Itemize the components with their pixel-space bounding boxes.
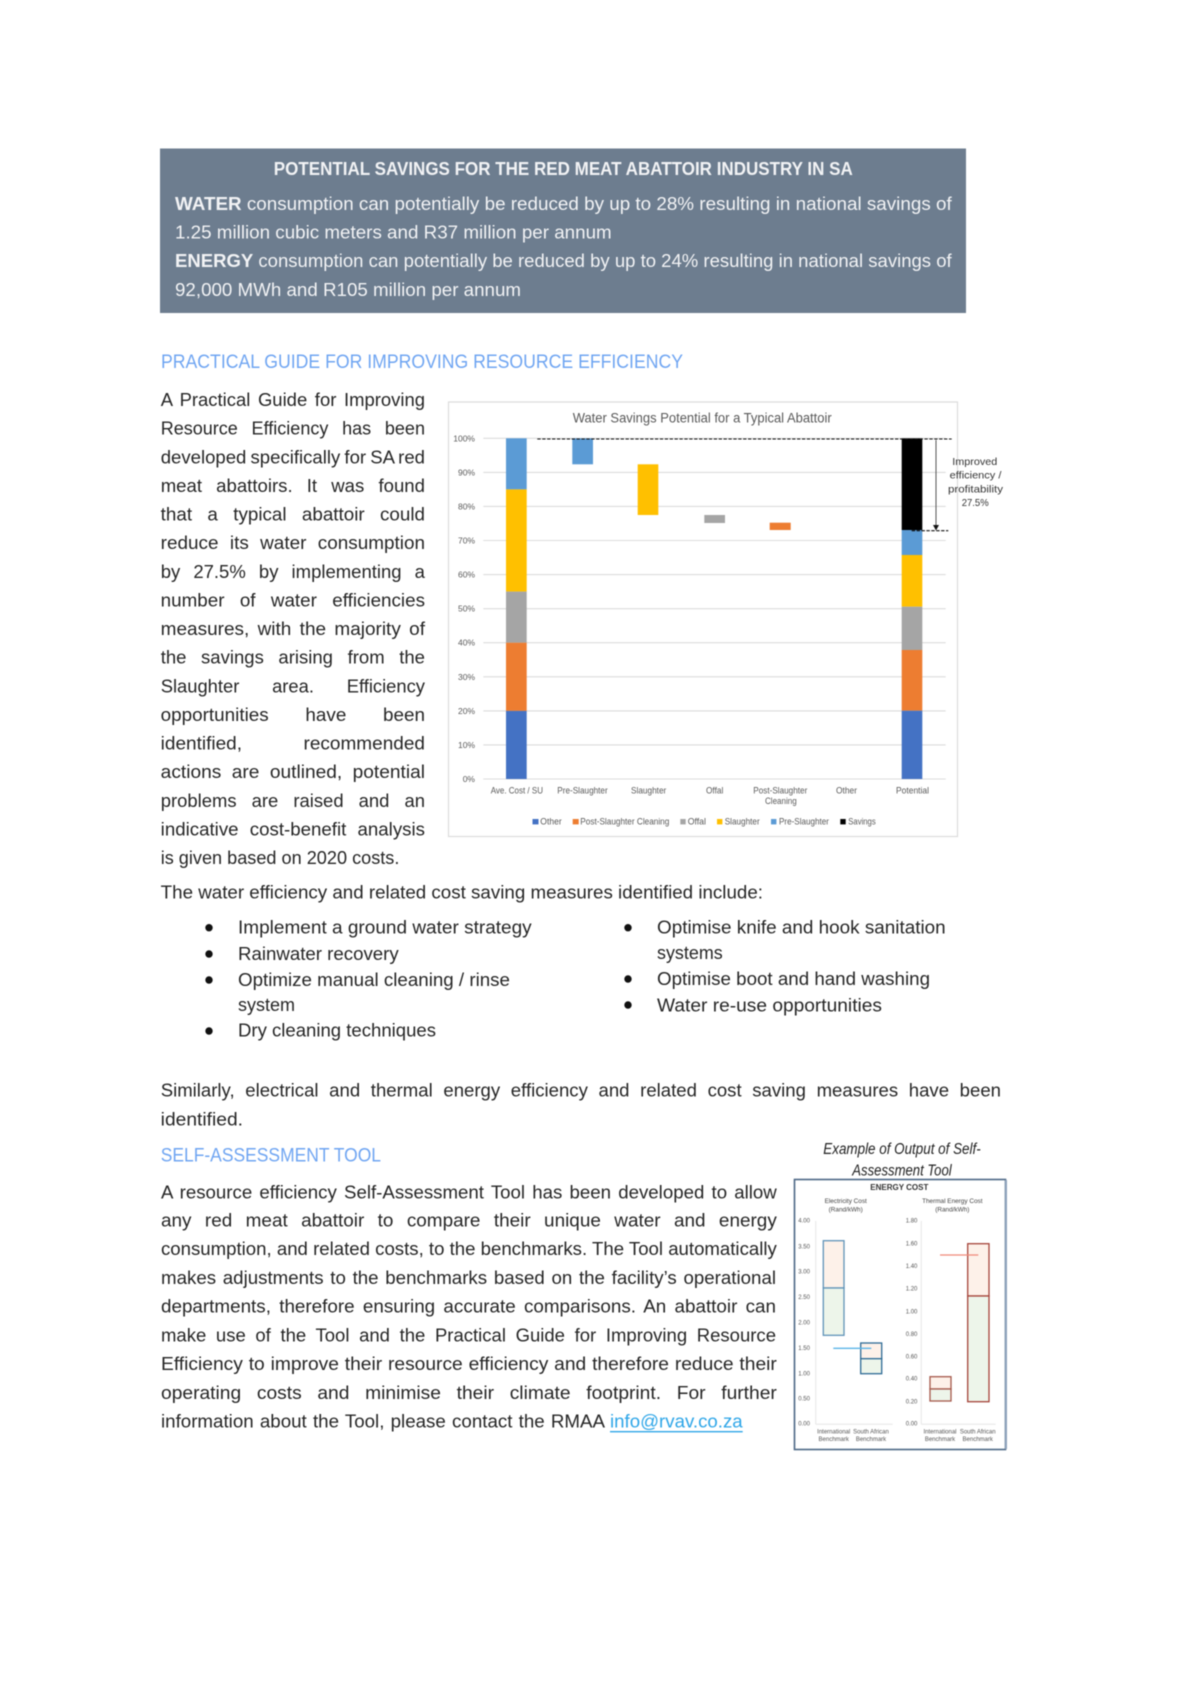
sub-chart: thermal energy cost: 1.60	[906, 1241, 918, 1247]
chart legend: Savings	[848, 816, 876, 826]
sub-chart: electricity cost: 0.00	[798, 1422, 811, 1428]
y axis labels: 100%	[453, 433, 475, 443]
sub-chart: thermal energy cost: 0.60	[906, 1355, 918, 1361]
annotation: improved efficiency: profitability	[948, 485, 1004, 496]
text block: practical guide description: measures, with the majority of	[161, 618, 426, 639]
annotation: improved efficiency	[948, 457, 1004, 509]
bullet list: left column: Implement a ground water strategy	[238, 916, 532, 937]
sub-chart: thermal energy cost	[906, 1198, 996, 1443]
chart: water savings potential	[448, 402, 1004, 836]
sub-chart: thermal energy cost: 1.80	[906, 1219, 918, 1225]
text: energy measures	[161, 1080, 1001, 1129]
y axis labels: 10%	[458, 740, 475, 750]
sub-chart: electricity cost: 4.00	[798, 1219, 811, 1225]
y axis labels: 60%	[458, 570, 475, 580]
heading: self-assessment tool: SELF-ASSESSMENT TOOL	[161, 1145, 381, 1167]
banner text: energy savings: ENERGY consumption can potentially be reduced by up to 24% resulting in national savings of	[175, 250, 953, 271]
sub-chart: thermal energy cost: 0.20	[906, 1400, 918, 1406]
sub-chart: electricity cost: 0.50	[798, 1397, 811, 1403]
text block: self-assessment description: make use of the Tool and the Practical Guide for Improving Resource	[161, 1325, 776, 1346]
y axis labels: 70%	[458, 536, 475, 546]
text block: practical guide description: Resource Efficiency has been	[161, 418, 425, 439]
sub-chart: electricity cost: 1.50	[798, 1346, 811, 1352]
stacked bar: potential with savings	[902, 438, 922, 779]
banner text: energy savings: 92,000 MWh and R105 million per annum	[175, 279, 521, 300]
heading: practical guide: PRACTICAL GUIDE FOR IMPROVING RESOURCE EFFICIENCY	[161, 351, 683, 373]
y axis labels: 80%	[458, 501, 475, 511]
sub-chart: electricity cost: Benchmark	[819, 1437, 850, 1443]
text block: practical guide description: opportunities have been	[161, 704, 425, 725]
sub-chart: electricity cost: 3.50	[798, 1244, 811, 1250]
sub-chart: thermal energy cost: Thermal Energy Cost	[922, 1198, 983, 1205]
chart legend: Post-Slaughter Cleaning	[580, 816, 669, 826]
sub-chart: thermal energy cost: 0.80	[906, 1332, 918, 1338]
text block: practical guide description: indicative cost-benefit analysis	[161, 818, 425, 839]
sub-chart: electricity cost	[798, 1198, 893, 1443]
x axis labels	[491, 785, 929, 806]
sub-chart: thermal energy cost: Benchmark	[963, 1437, 994, 1443]
x axis labels: Pre-Slaughter	[557, 785, 608, 795]
sub-chart: electricity cost: International	[817, 1429, 850, 1435]
sub-chart: electricity cost: (Rand/kWh)	[829, 1207, 863, 1214]
sub-chart: electricity cost: South African	[853, 1429, 889, 1435]
bullet list: left column: Rainwater recovery	[238, 943, 399, 964]
sub-chart: thermal energy cost: 0.00	[906, 1422, 918, 1428]
x axis labels: Ave. Cost / SU	[491, 785, 543, 795]
banner heading: POTENTIAL SAVINGS FOR THE RED MEAT ABATTOIR INDUSTRY IN SA	[274, 158, 853, 179]
chart: energy cost benchmark output	[794, 1180, 1006, 1450]
y axis labels: 30%	[458, 672, 475, 682]
annotation: improved efficiency: Improved	[952, 457, 998, 468]
waterfall bar: post-slaughter cleaning	[770, 523, 791, 530]
x axis labels: Offal	[706, 785, 723, 795]
benchmark box: international electricity	[823, 1241, 844, 1335]
text block: self-assessment description: departments, therefore ensuring accurate comparisons. An abattoir can	[161, 1296, 776, 1317]
text block: practical guide description: the savings arising from the	[161, 647, 425, 668]
benchmark box: international thermal	[930, 1377, 951, 1401]
text: energy measures: identified.	[161, 1108, 243, 1129]
sub-chart: thermal energy cost: 1.40	[906, 1264, 918, 1270]
text: energy measures: Similarly, electrical and thermal energy efficiency and related cost saving measures have been	[161, 1080, 1001, 1101]
sub-chart: thermal energy cost: 1.20	[906, 1287, 918, 1293]
y axis labels: 20%	[458, 706, 475, 716]
text block: self-assessment description: A resource efficiency Self-Assessment Tool has been developed to allow	[161, 1181, 777, 1202]
text block: practical guide description	[161, 389, 426, 868]
text block: practical guide description: actions are outlined, potential	[161, 761, 425, 782]
chart title: Water Savings Potential for a Typical Abattoir	[573, 410, 832, 425]
bullet list: right column: Water re-use opportunities	[657, 995, 882, 1016]
text block: practical guide description: number of water efficiencies	[161, 589, 425, 610]
bullet list: left column: Dry cleaning techniques	[238, 1020, 436, 1041]
x axis labels: Other	[836, 785, 857, 795]
x axis labels: Potential	[896, 785, 929, 795]
text block: self-assessment description: makes adjustments to the benchmarks based on the facility’s operational	[161, 1267, 776, 1288]
x axis labels: Slaughter	[631, 785, 666, 795]
panel: potential savings banner	[160, 148, 966, 313]
sub-chart: thermal energy cost: 0.40	[906, 1377, 918, 1383]
chart caption	[823, 1141, 981, 1179]
y axis labels: 0%	[463, 774, 475, 784]
y axis labels: 90%	[458, 467, 475, 477]
sub-chart: electricity cost: Electricity Cost	[825, 1198, 867, 1205]
y axis labels: 40%	[458, 638, 475, 648]
text block: practical guide description: A Practical Guide for Improving	[161, 389, 425, 410]
annotation: improved efficiency: efficiency /	[950, 470, 1002, 481]
bullet list: left column	[205, 916, 532, 1041]
text block: self-assessment description: any red meat abattoir to compare their unique water and energy	[161, 1210, 778, 1231]
text block: self-assessment description: consumption, and related costs, to the benchmarks. The Tool automatically	[161, 1238, 777, 1259]
chart heading: energy cost: ENERGY COST	[870, 1183, 928, 1192]
x axis labels: Cleaning	[765, 796, 797, 806]
bullet list: right column	[624, 916, 946, 1016]
email link: info@rvav.co.za	[610, 1411, 743, 1432]
sub-chart: electricity cost: 2.50	[798, 1295, 811, 1301]
chart caption: Example of Output of Self-	[823, 1141, 981, 1158]
waterfall bar: offal	[704, 515, 725, 523]
chart legend: Pre-Slaughter	[779, 816, 829, 826]
benchmark box: south african electricity	[861, 1343, 882, 1374]
chart legend	[532, 816, 876, 826]
sub-chart: electricity cost: 3.00	[798, 1270, 811, 1276]
text block: practical guide description: Slaughter area. Efficiency	[161, 675, 426, 696]
benchmark box: south african thermal	[968, 1244, 989, 1402]
sub-chart: thermal energy cost: International	[923, 1429, 957, 1435]
annotation: improved efficiency: 27.5%	[962, 498, 989, 509]
text block: self-assessment description: information about the Tool, please contact the RMAA	[161, 1411, 606, 1432]
bullet list: right column: systems	[657, 942, 723, 963]
text: measures intro: The water efficiency and related cost saving measures identified include:	[161, 881, 763, 902]
text block: practical guide description: developed specifically for SA red	[161, 446, 425, 467]
sub-chart: thermal energy cost: South African	[960, 1429, 996, 1435]
waterfall bar: pre-slaughter	[572, 438, 593, 464]
text block: practical guide description: that a typical abattoir could	[161, 504, 425, 524]
sub-chart: electricity cost: Benchmark	[856, 1437, 887, 1443]
text block: practical guide description: problems are raised and an	[161, 790, 425, 811]
chart legend: Offal	[688, 816, 706, 826]
bullet list: left column: Optimize manual cleaning / rinse	[238, 969, 510, 990]
chart legend: Other	[540, 816, 562, 826]
arrow: improvement span	[933, 440, 939, 530]
banner text: water savings: 1.25 million cubic meters and R37 million per annum	[175, 222, 612, 243]
text block: practical guide description: is given based on 2020 costs.	[161, 847, 399, 868]
y axis labels	[453, 433, 475, 784]
text block: self-assessment description	[161, 1181, 778, 1432]
chart legend: Slaughter	[725, 816, 760, 826]
text block: self-assessment description: operating costs and minimise their climate footprint. For further	[161, 1382, 777, 1403]
sub-chart: thermal energy cost: (Rand/kWh)	[935, 1207, 969, 1214]
banner text: water savings: WATER consumption can potentially be reduced by up to 28% resulting in national savings of	[175, 193, 953, 214]
y axis labels: 50%	[458, 604, 475, 614]
text block: practical guide description: reduce its water consumption	[161, 532, 425, 553]
chart caption: Assessment Tool	[851, 1162, 952, 1179]
banner text: water savings	[175, 193, 953, 243]
banner text: energy savings	[175, 250, 953, 300]
bullet list: left column: system	[238, 994, 295, 1015]
sub-chart: thermal energy cost: 1.00	[906, 1309, 918, 1315]
text block: practical guide description: meat abattoirs. It was found	[161, 475, 425, 496]
text block: practical guide description: by 27.5% by implementing a	[161, 561, 426, 582]
sub-chart: thermal energy cost: Benchmark	[925, 1437, 956, 1443]
x axis labels: Post-Slaughter	[753, 785, 807, 795]
bullet list: right column: Optimise boot and hand washing	[657, 968, 930, 989]
waterfall bar: slaughter	[638, 464, 658, 515]
text block: practical guide description: identified, recommended	[161, 732, 425, 754]
text block: self-assessment description: Efficiency to improve their resource efficiency and therefore reduce their	[161, 1353, 777, 1374]
stacked bar: average cost	[506, 438, 527, 779]
sub-chart: electricity cost: 1.00	[798, 1372, 811, 1378]
bullet list: right column: Optimise knife and hook sanitation	[657, 916, 946, 937]
sub-chart: electricity cost: 2.00	[798, 1321, 811, 1327]
